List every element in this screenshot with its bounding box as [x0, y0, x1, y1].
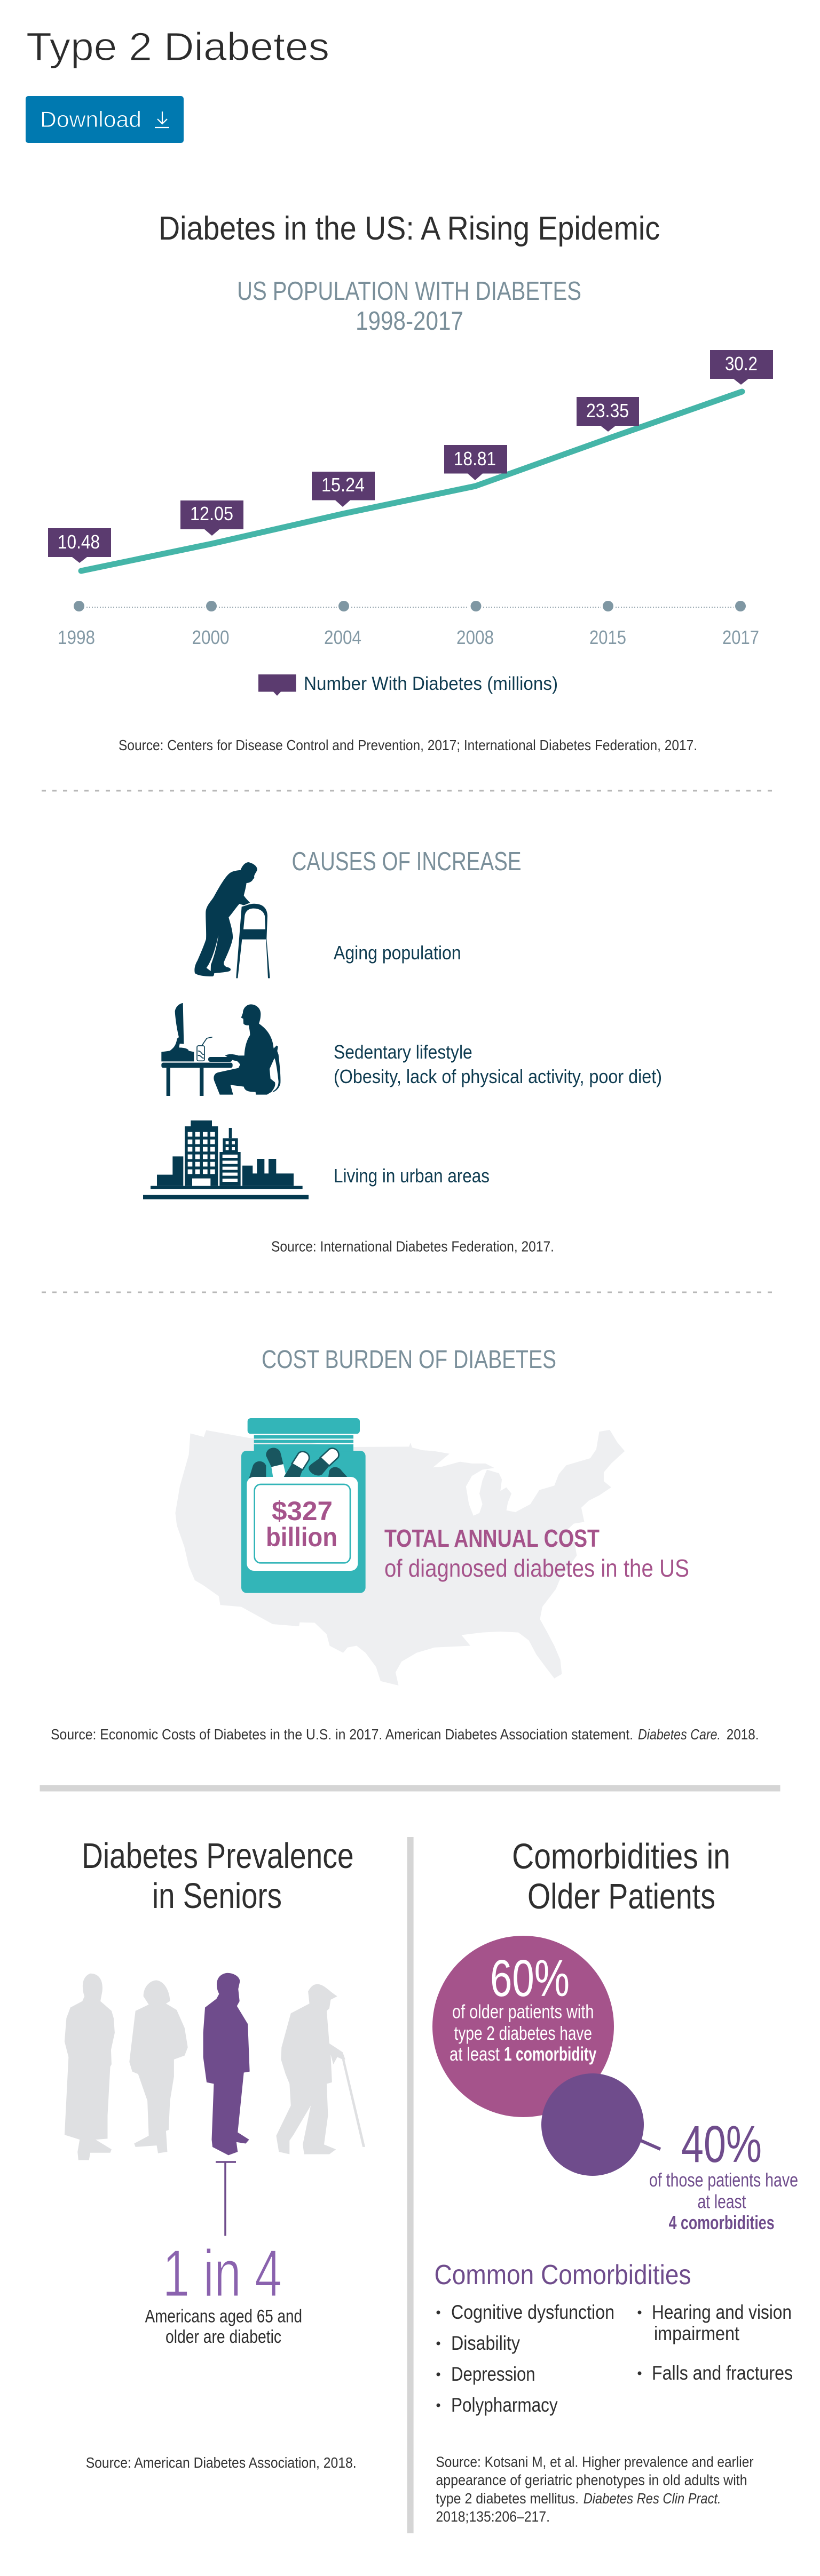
source: comorbidities: Source: Kotsani M, et al. Higher prevalence and earlier: [436, 2454, 754, 2470]
stat: 1 in 4: 1 in 4: [162, 2237, 282, 2310]
data label 2000: 12.05: [190, 503, 233, 524]
chart heading: [237, 277, 581, 336]
circle: 60 percent: 60%: [490, 1949, 570, 2007]
text: Americans aged 65: older are diabetic: [165, 2327, 281, 2347]
text: sedentary lifestyle: (Obesity, lack of physical activity, poor diet): [334, 1066, 662, 1087]
text: 327 billion: [266, 1496, 337, 1552]
list: comorbidities: Hearing and vision: [652, 2301, 792, 2323]
text: 327 billion: billion: [266, 1522, 337, 1552]
callout: total annual cost: TOTAL ANNUAL COST: [384, 1524, 600, 1552]
icon: city skyline: [143, 1120, 309, 1199]
list: comorbidities: Polypharmacy: [451, 2394, 558, 2416]
heading: comorbidities: Older Patients: [527, 1877, 715, 1917]
panel: prevalence in seniors: [65, 1836, 365, 2471]
axis year labels: 2004: [324, 626, 361, 648]
data label 2004: 15.24: [321, 474, 365, 496]
circle: 40 percent: [541, 2073, 660, 2176]
icon: download arrow: [155, 112, 169, 128]
data label 1998: [48, 528, 111, 563]
data label 2017: 30.2: [725, 353, 758, 375]
source: cost: Diabetes Care.: [638, 1726, 721, 1743]
icon: four senior silhouettes: [65, 1973, 365, 2160]
heading: rising epidemic: Diabetes in the US: A Rising Epidemic: [159, 210, 660, 247]
heading: prevalence: Diabetes Prevalence: [82, 1836, 354, 1876]
list: comorbidities: Depression: [451, 2363, 535, 2385]
data label 2000: [180, 500, 243, 536]
chart heading: US POPULATION WITH DIABETES: [237, 277, 581, 306]
map: United States: [175, 1430, 625, 1685]
download button: Download: [40, 107, 141, 132]
text: living in urban areas: Living in urban areas: [334, 1165, 490, 1187]
heading: prevalence: [82, 1836, 354, 1916]
text: aging population: Aging population: [334, 942, 461, 964]
text: sedentary lifestyle: [334, 1041, 662, 1087]
heading: comorbidities: Comorbidities in: [512, 1836, 730, 1877]
circle: 60 percent: at least: [450, 2043, 500, 2065]
axis year labels: 2000: [192, 626, 230, 648]
heading: comorbidities: [512, 1836, 730, 1917]
text: Americans aged 65: [145, 2307, 302, 2347]
callout: total annual cost: [384, 1524, 689, 1582]
source: comorbidities: [436, 2454, 754, 2525]
source: seniors: Source: American Diabetes Association, 2018.: [86, 2454, 357, 2471]
source: cost: 2018.: [727, 1726, 759, 1743]
data label 2004: [312, 472, 375, 507]
source: comorbidities: 2018;135:206–217.: [436, 2508, 550, 2525]
list: comorbidities: Falls and fractures: [652, 2362, 793, 2384]
stat: 40 percent: 40%: [681, 2115, 762, 2173]
icon: pill bottle with cost: [241, 1418, 366, 1593]
chart legend: Number With Diabetes (millions): [304, 673, 558, 694]
callout: total annual cost: of diagnosed diabetes in the US: [384, 1554, 689, 1582]
data label 2015: [577, 397, 639, 432]
text: Americans aged 65: Americans aged 65 and: [145, 2307, 302, 2327]
download button: [26, 96, 184, 143]
line chart: US population with diabetes: [48, 350, 773, 648]
stat: 40 percent: [649, 2115, 798, 2233]
trend line: [81, 392, 742, 571]
list: comorbidities: [437, 2301, 793, 2416]
source: cost: Source: Economic Costs of Diabetes in the U.S. in 2017. American Diabetes Association statement.: [51, 1726, 633, 1743]
data label 2015: 23.35: [586, 400, 629, 422]
data label 2008: [444, 445, 507, 480]
source: comorbidities: type 2 diabetes mellitus.: [436, 2490, 579, 2507]
chart heading: 1998-2017: [356, 307, 463, 336]
circle: 60 percent: 1 comorbidity: [504, 2043, 596, 2065]
connector: [216, 2162, 236, 2236]
stat: 40 percent: at least: [697, 2191, 746, 2212]
text: sedentary lifestyle: Sedentary lifestyle: [334, 1041, 472, 1063]
icon: person with walker: [194, 862, 270, 978]
list: comorbidities: Cognitive dysfunction: [451, 2301, 614, 2323]
list: comorbidities: impairment: [654, 2323, 740, 2344]
axis markers: [74, 601, 746, 611]
axis year labels: 1998: [58, 626, 95, 648]
stat: 40 percent: 4 comorbidities: [669, 2212, 775, 2233]
heading: common comorbidities: Common Comorbidities: [435, 2260, 691, 2291]
icon: person at desk: [161, 1003, 280, 1096]
axis year labels: 2017: [722, 626, 759, 648]
circle: 60 percent: of older patients with: [452, 2001, 594, 2023]
source: chart: Source: Centers for Disease Control and Prevention, 2017; International Diabetes Federation, 2017.: [119, 737, 697, 753]
axis year labels: 2015: [589, 626, 626, 648]
heading: cost burden: COST BURDEN OF DIABETES: [262, 1346, 556, 1374]
source: causes: Source: International Diabetes Federation, 2017.: [271, 1238, 554, 1255]
axis year labels: [58, 626, 759, 648]
heading: causes of increase: CAUSES OF INCREASE: [291, 847, 521, 876]
panel: comorbidities: [432, 1836, 798, 2525]
circle: 60 percent: type 2 diabetes have: [454, 2022, 592, 2044]
source: comorbidities: Diabetes Res Clin Pract.: [584, 2490, 721, 2507]
title: Type 2 Diabetes: [26, 25, 329, 69]
list: comorbidities: Disability: [451, 2332, 520, 2354]
data label 2008: 18.81: [454, 448, 496, 470]
source: comorbidities: appearance of geriatric phenotypes in old adults with: [436, 2472, 747, 2488]
axis year labels: 2008: [456, 626, 494, 648]
data label 2017: [710, 350, 773, 385]
circle: 60 percent: [432, 1936, 614, 2117]
heading: prevalence: in Seniors: [152, 1876, 282, 1916]
data label 1998: 10.48: [58, 531, 100, 553]
text: 327 billion: $327: [272, 1496, 333, 1526]
